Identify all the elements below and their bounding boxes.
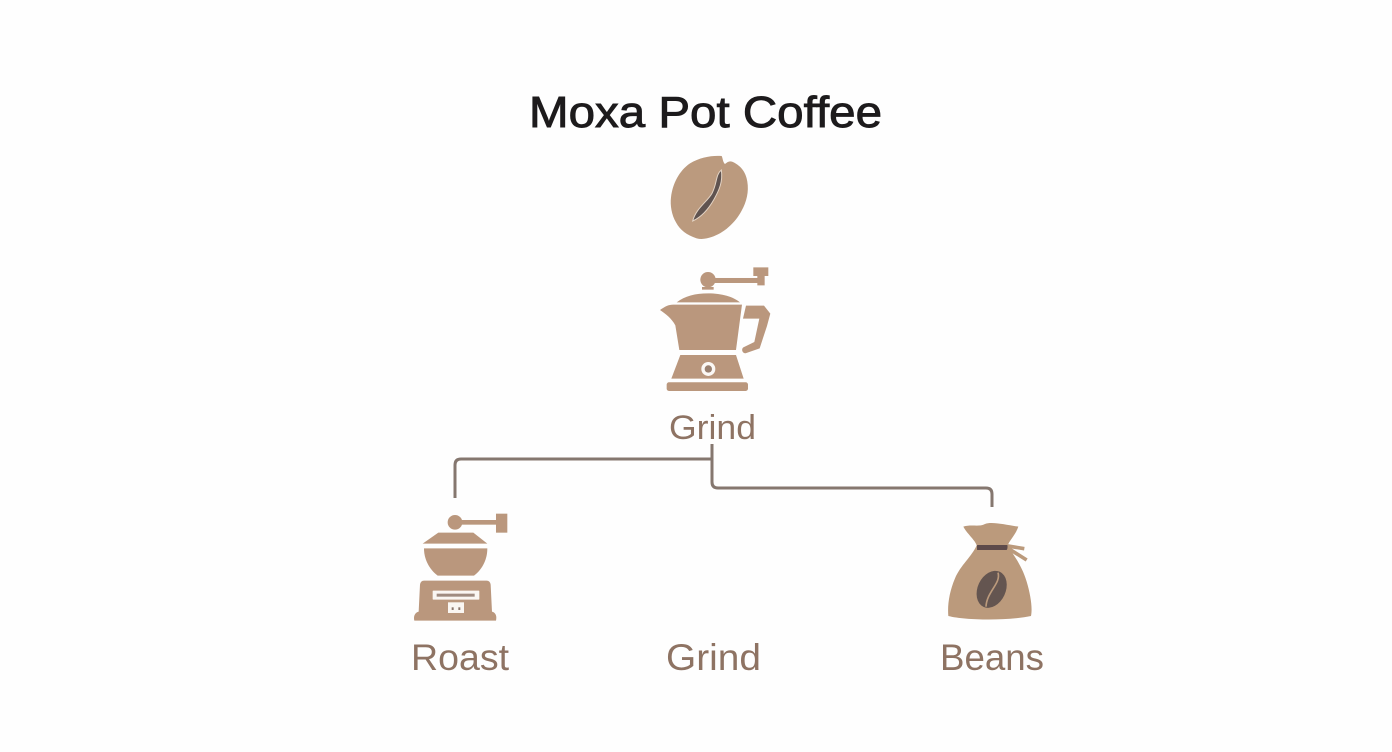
pot body <box>660 305 742 350</box>
dial <box>701 362 715 376</box>
label: Grind bottom: Grind <box>666 637 761 678</box>
label: Roast: Roast <box>411 637 510 678</box>
label: Grind top: Grind <box>669 409 756 447</box>
drawer knob <box>448 602 464 613</box>
icon: coffee bag <box>948 523 1032 619</box>
crank knob and arm <box>700 267 768 290</box>
pot lid <box>677 293 740 302</box>
tie <box>977 545 1008 550</box>
grinder lid <box>423 533 487 544</box>
label: Beans: Beans <box>940 637 1044 678</box>
crank <box>448 514 507 533</box>
title: Moxa Pot Coffee <box>529 88 882 137</box>
base plate <box>667 382 748 391</box>
icon: moka pot with grinder handle <box>660 267 770 391</box>
grinder base <box>414 581 496 621</box>
connector lines <box>455 444 992 507</box>
grinder bowl <box>424 548 487 576</box>
icon: coffee bean <box>671 156 748 239</box>
bean on bag <box>971 566 1013 613</box>
pot handle <box>742 306 770 353</box>
sack <box>948 523 1032 619</box>
icon: coffee grinder <box>414 514 507 621</box>
pot base <box>671 355 744 379</box>
drawer slot <box>433 591 479 600</box>
